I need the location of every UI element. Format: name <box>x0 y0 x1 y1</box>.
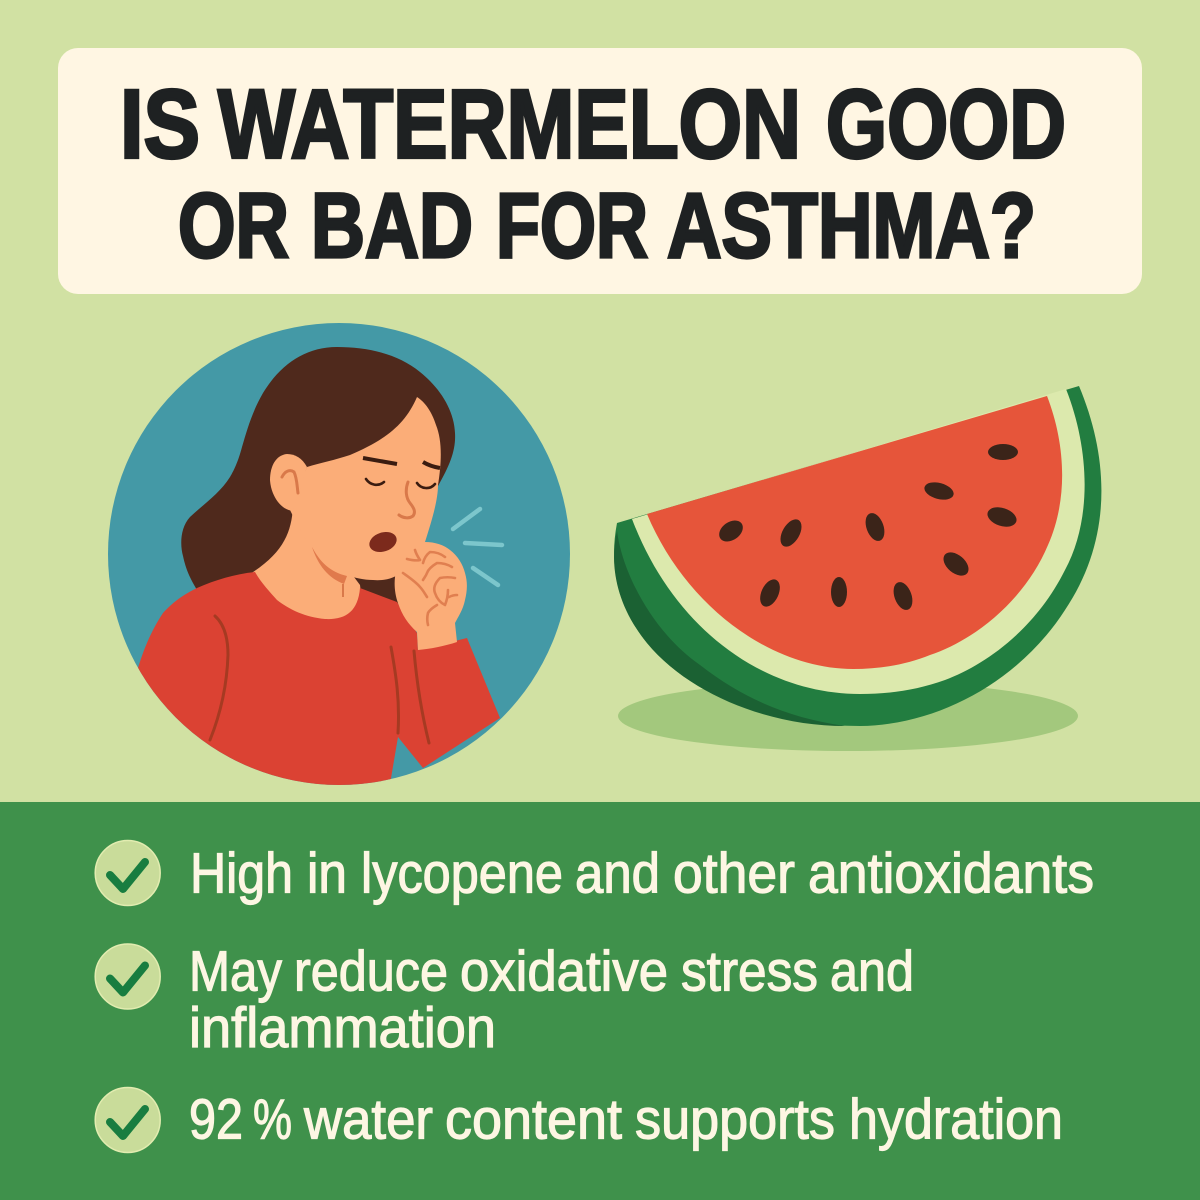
title: ASTHMA? <box>667 175 1036 277</box>
title: FOR <box>496 175 648 277</box>
benefit 3: supports <box>635 1088 835 1152</box>
neck shadow <box>312 547 347 584</box>
seeds <box>715 444 1019 613</box>
background <box>0 0 1200 802</box>
benefit 2: May <box>189 940 282 1004</box>
title: IS <box>120 70 200 178</box>
dark rind side <box>614 531 845 726</box>
title <box>120 70 1066 277</box>
benefit 3: water <box>303 1088 433 1152</box>
benefit 2 <box>95 940 914 1060</box>
benefit 1: lycopene <box>361 842 563 906</box>
title: WATERMELON <box>218 70 801 178</box>
benefit 1 <box>95 840 1094 906</box>
benefit 2: inflammation <box>189 996 496 1060</box>
nose <box>399 482 414 518</box>
face <box>290 397 441 580</box>
green rind <box>614 386 1101 726</box>
hand <box>395 542 467 650</box>
red flesh <box>647 396 1062 669</box>
benefit 2: reduce <box>294 940 448 1004</box>
eyebrows <box>363 458 440 468</box>
benefit 3: % <box>253 1088 292 1152</box>
title panel <box>58 48 1142 294</box>
benefit 3: 92 <box>189 1088 243 1152</box>
illustration: woman coughing <box>108 323 570 790</box>
benefit 1: antioxidants <box>808 842 1094 906</box>
hair <box>181 347 455 590</box>
illustration: watermelon slice <box>614 386 1101 751</box>
cough lines <box>453 509 502 585</box>
sweater <box>138 572 500 790</box>
benefit 1: in <box>307 842 347 906</box>
neck <box>252 514 360 620</box>
benefit 2: and <box>830 940 914 1004</box>
ear <box>270 454 307 511</box>
benefit 1: and <box>575 842 660 906</box>
benefit 1: other <box>673 842 795 906</box>
benefit 2: oxidative <box>460 940 668 1004</box>
benefit 3 <box>95 1088 1063 1152</box>
title: BAD <box>311 175 473 277</box>
fingers <box>403 550 457 625</box>
mouth <box>369 532 397 552</box>
benefit 2: stress <box>681 940 818 1004</box>
benefit 1: High <box>190 842 293 906</box>
shadow <box>618 681 1078 751</box>
sweater folds <box>210 616 429 743</box>
under-chin shadow <box>354 576 398 604</box>
benefit 3: hydration <box>849 1088 1063 1152</box>
eyes <box>366 479 435 488</box>
benefit 3: content <box>445 1088 622 1152</box>
panel: benefits <box>0 802 1200 1200</box>
title: OR <box>178 175 289 277</box>
cream rind <box>632 389 1085 694</box>
title: GOOD <box>826 70 1066 178</box>
